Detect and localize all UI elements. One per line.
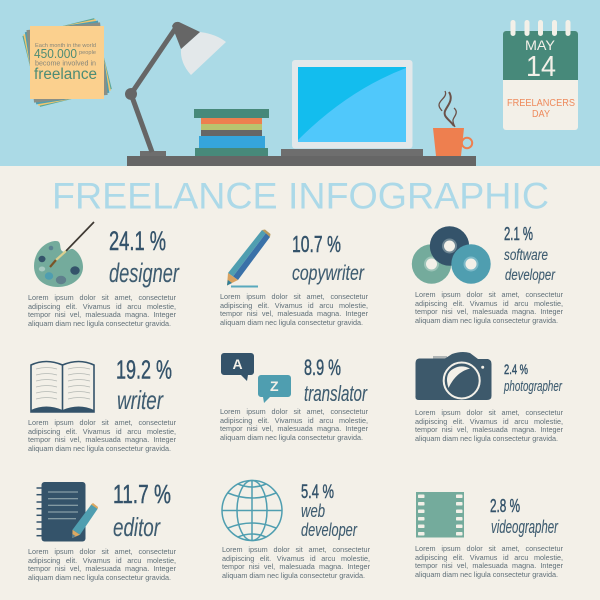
text block: adipiscing elit. Vivamus id arcu molestie, <box>415 299 563 308</box>
text block <box>220 407 368 442</box>
text block: tempor nisi vel, malesuada magna. Integer <box>28 435 176 444</box>
calendar: Freelancers Day: DAY <box>532 109 550 120</box>
role: writer: writer <box>117 385 164 415</box>
text block: Lorem ipsum dolor sit amet, consectetur <box>28 293 176 302</box>
text block: aliquam diam nec ligula consectetur gravida. <box>28 573 171 582</box>
desk lamp <box>125 22 226 156</box>
role: editor: editor <box>113 512 161 542</box>
stat: 5.4 %: 5.4 % <box>301 482 334 503</box>
text block <box>220 292 368 327</box>
text block <box>222 545 370 580</box>
role: web developer <box>301 501 358 540</box>
stack of books <box>194 109 269 156</box>
text block: tempor nisi vel, malesuada magna. Integer <box>220 424 368 433</box>
text block <box>415 544 563 579</box>
text block: aliquam diam nec ligula consectetur gravida. <box>415 316 558 325</box>
panel: photographer <box>415 352 563 443</box>
icon: speech bubbles: Z <box>270 378 279 394</box>
icon: pencil <box>227 230 270 288</box>
icon: speech bubbles <box>221 353 291 403</box>
text block: adipiscing elit. Vivamus id arcu molestie, <box>415 553 563 562</box>
icon: camera <box>415 352 492 400</box>
sticky note stat <box>22 18 112 107</box>
panel: translator <box>220 353 368 442</box>
text block: Lorem ipsum dolor sit amet, consectetur <box>28 418 176 427</box>
text block: Lorem ipsum dolor sit amet, consectetur <box>415 544 563 553</box>
calendar: Freelancers Day: MAY <box>525 37 556 53</box>
icon: film strip <box>416 492 464 538</box>
panel: designer <box>28 221 180 328</box>
stat: 10.7 %: 10.7 % <box>292 231 341 257</box>
text block: Lorem ipsum dolor sit amet, consectetur <box>222 545 370 554</box>
text block: tempor nisi vel, malesuada magna. Integer <box>415 425 563 434</box>
calendar: Freelancers Day: 14 <box>526 51 556 83</box>
panel: web developer <box>221 480 370 580</box>
icon: globe <box>222 480 282 540</box>
text block: Lorem ipsum dolor sit amet, consectetur <box>220 407 368 416</box>
desk top <box>127 156 476 166</box>
panel: desk scene header <box>0 0 600 166</box>
text block: tempor nisi vel, malesuada magna. Integer <box>415 561 563 570</box>
sticky note stat: Each month in the world <box>35 43 96 49</box>
text block: adipiscing elit. Vivamus id arcu molestie, <box>28 556 176 565</box>
stat: 2.8 %: 2.8 % <box>490 496 520 516</box>
laptop <box>281 60 423 156</box>
sticky note stat: 450.000 <box>34 47 77 61</box>
text block: tempor nisi vel, malesuada magna. Integer <box>28 310 176 319</box>
panel: software developer <box>412 224 563 325</box>
role: software developer <box>504 247 555 284</box>
sticky note stat: become involved in <box>35 60 96 68</box>
text block <box>415 290 563 325</box>
text block: Lorem ipsum dolor sit amet, consectetur <box>415 408 563 417</box>
text block: aliquam diam nec ligula consectetur gravida. <box>28 444 171 453</box>
stat: 2.1 %: 2.1 % <box>504 224 533 244</box>
text block: Lorem ipsum dolor sit amet, consectetur <box>28 547 176 556</box>
text block <box>415 408 563 443</box>
calendar: Freelancers Day <box>503 20 578 130</box>
text block: adipiscing elit. Vivamus id arcu molestie, <box>222 554 370 563</box>
text block: adipiscing elit. Vivamus id arcu molestie, <box>220 416 368 425</box>
text block: aliquam diam nec ligula consectetur gravida. <box>220 433 363 442</box>
panel: copywriter <box>220 230 368 327</box>
icon: notebook and pencil <box>36 482 98 542</box>
text block: adipiscing elit. Vivamus id arcu molestie, <box>28 427 176 436</box>
sticky note stat: people <box>79 50 96 56</box>
text block <box>28 547 176 582</box>
text block: aliquam diam nec ligula consectetur gravida. <box>222 571 365 580</box>
text block: adipiscing elit. Vivamus id arcu molestie, <box>415 417 563 426</box>
sticky note stat: freelance <box>34 66 97 83</box>
icon: discs <box>412 226 491 284</box>
coffee cup with steam <box>433 91 472 156</box>
role: software developer: software <box>504 247 548 264</box>
text block: tempor nisi vel, malesuada magna. Integer <box>28 564 176 573</box>
role: web developer: web <box>301 501 325 521</box>
text block <box>28 293 176 328</box>
text block: tempor nisi vel, malesuada magna. Integer <box>222 562 370 571</box>
panel: editor <box>28 479 176 582</box>
text block: adipiscing elit. Vivamus id arcu molestie, <box>220 301 368 310</box>
calendar: Freelancers Day: FREELANCERS <box>507 98 575 109</box>
icon: speech bubbles: A <box>232 356 243 372</box>
text block: aliquam diam nec ligula consectetur gravida. <box>415 570 558 579</box>
text block: Lorem ipsum dolor sit amet, consectetur <box>415 290 563 299</box>
text block: tempor nisi vel, malesuada magna. Integer <box>220 309 368 318</box>
panel: videographer <box>415 492 563 579</box>
text block: adipiscing elit. Vivamus id arcu molestie, <box>28 302 176 311</box>
text block: tempor nisi vel, malesuada magna. Integer <box>415 307 563 316</box>
stat: 8.9 %: 8.9 % <box>304 355 341 380</box>
icon: open book <box>31 362 94 412</box>
icon: paint palette <box>34 222 94 287</box>
text block: aliquam diam nec ligula consectetur gravida. <box>28 319 171 328</box>
text block <box>28 418 176 453</box>
panel: writer <box>28 356 176 453</box>
text block: aliquam diam nec ligula consectetur gravida. <box>415 434 558 443</box>
text block: Lorem ipsum dolor sit amet, consectetur <box>220 292 368 301</box>
stat: 2.4 %: 2.4 % <box>504 361 528 377</box>
text block: aliquam diam nec ligula consectetur gravida. <box>220 318 363 327</box>
